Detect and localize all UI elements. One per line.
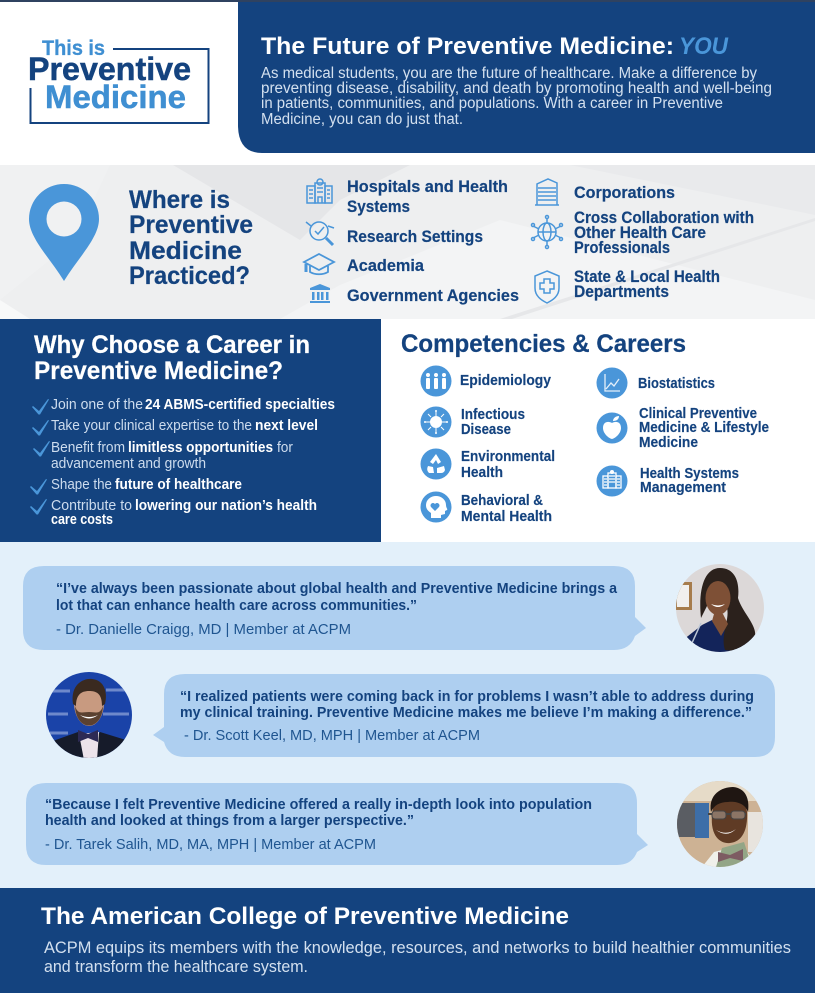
icon: map pin	[29, 184, 99, 281]
heading: Where is Preventive Medicine Practiced: Preventive	[129, 211, 253, 239]
label: infectious disease: Disease	[461, 422, 511, 438]
icon: corporate tower	[535, 179, 559, 205]
quote bubble: Scott Keel: - Dr. Scott Keel, MD, MPH | Member at ACPM	[184, 727, 480, 744]
label: cross collaboration: Professionals	[574, 239, 670, 257]
intro paragraph: in patients, communities, and populations. With a career in Preventive	[261, 95, 723, 112]
checkmark list: advancement and growth	[51, 456, 206, 472]
label: clinical preventive	[639, 406, 769, 451]
quote bubble: Danielle Craigg: - Dr. Danielle Craigg, MD | Member at ACPM	[56, 621, 351, 638]
label: health systems management	[640, 466, 739, 496]
label: hospitals	[347, 178, 508, 216]
footer heading: The American College of Preventive Medicine	[41, 903, 569, 930]
heading: Where is Preventive Medicine Practiced: Where is	[129, 186, 230, 214]
label: research settings: Research Settings	[347, 228, 483, 246]
logo: This is Preventive Medicine: This is	[42, 37, 105, 60]
quote bubble: Tarek Salih	[26, 783, 648, 865]
intro paragraph: preventing disease, disability, and death by promoting health and well-being	[261, 80, 772, 97]
checkmark list: care costs	[51, 512, 113, 528]
label: clinical preventive: Clinical Preventive	[639, 406, 757, 422]
heading: Where is Preventive Medicine Practiced: Medicine	[129, 237, 242, 265]
checkmark list: lowering our nation’s health	[135, 498, 317, 514]
icon: biostatistics chart	[596, 368, 628, 398]
panel: testimonials	[0, 542, 815, 888]
checkmark list: Contribute to	[51, 498, 132, 514]
label: infectious disease: Infectious	[461, 407, 525, 423]
quote bubble: Scott Keel: “I realized patients were coming back in for problems I wasn’t able to address during	[180, 689, 754, 705]
label: clinical preventive: Medicine & Lifestyle	[639, 420, 769, 436]
label: state and local	[574, 268, 720, 301]
label: environmental health: Health	[461, 465, 503, 481]
heading: Where is Preventive Medicine Practiced: Practiced?	[129, 262, 250, 290]
checkmark list: next level	[255, 418, 318, 434]
icon: shield with cross	[535, 271, 559, 303]
label: government agencies: Government Agencies	[347, 287, 519, 305]
heading: competencies: Competencies & Careers	[401, 330, 686, 358]
logo: This is Preventive Medicine: Preventive	[28, 51, 191, 87]
intro paragraph: As medical students, you are the future of healthcare. Make a difference by	[261, 65, 757, 82]
icon: health systems building	[596, 466, 628, 496]
checkmark list: Take your clinical expertise to the	[51, 418, 252, 434]
quote bubble: Danielle Craigg	[23, 566, 646, 650]
label: health systems management: Management	[640, 480, 726, 496]
icon: behavioral head	[420, 492, 452, 522]
icon: globe network	[532, 216, 562, 248]
portrait: Scott Keel	[46, 672, 132, 760]
icon: hospital	[307, 179, 332, 203]
label: clinical preventive: Medicine	[639, 435, 698, 451]
checkmark list: Join one of the	[51, 397, 143, 413]
checkmark list: limitless opportunities	[128, 440, 273, 456]
portrait: Tarek Salih	[677, 781, 763, 867]
panel: where is preventive medicine practiced	[0, 165, 815, 319]
checkmark list: Shape the	[51, 477, 112, 493]
label: biostatistics: Biostatistics	[638, 376, 715, 392]
icon: infectious disease virus	[420, 406, 452, 438]
icon: government building	[310, 284, 330, 303]
icon: research magnifier	[306, 222, 334, 245]
icon: clinical apple	[596, 412, 628, 444]
panel: why choose a career	[0, 319, 381, 542]
label: environmental health	[461, 449, 555, 481]
footer paragraph: and transform the healthcare system.	[44, 957, 308, 976]
label: behavioral and mental health: Behavioral &	[461, 493, 543, 509]
heading: why choose: Why Choose a Career in	[34, 331, 310, 359]
icon: environmental recycle	[420, 448, 452, 480]
label: academia: Academia	[347, 257, 425, 275]
heading: The Future of Preventive Medicine: YOU	[679, 33, 729, 60]
quote bubble: Danielle Craigg: “I’ve always been passionate about global health and Preventive Medicine brings a	[56, 581, 618, 597]
logo: This is Preventive Medicine: Medicine	[45, 79, 186, 115]
heading: The Future of Preventive Medicine: The Future of Preventive Medicine:	[261, 33, 674, 60]
quote bubble: Danielle Craigg: lot that can enhance health care across communities.”	[56, 598, 417, 614]
checkmark list: 24 ABMS-certified specialties	[145, 397, 335, 413]
label: state and local: Departments	[574, 283, 669, 301]
quote bubble: Tarek Salih: - Dr. Tarek Salih, MD, MA, MPH | Member at ACPM	[45, 836, 376, 853]
checkmark list: Benefit from	[51, 440, 125, 456]
logo: This is Preventive Medicine	[28, 37, 208, 123]
heading: why choose	[34, 331, 310, 385]
panel: competencies and careers	[401, 330, 769, 525]
intro paragraph: Medicine, you can do just that.	[261, 111, 463, 128]
footer paragraph: ACPM equips its members with the knowledge, resources, and networks to build healthier communities	[44, 938, 791, 957]
footer paragraph	[44, 938, 791, 976]
panel: header intro	[238, 2, 815, 153]
heading: Where is Preventive Medicine Practiced	[129, 186, 253, 290]
panel: American College of Preventive Medicine footer	[0, 888, 815, 993]
label: hospitals: Hospitals and Health	[347, 178, 508, 196]
quote bubble: Scott Keel	[153, 674, 775, 757]
icon: epidemiology people	[420, 366, 452, 396]
label: cross collaboration: Other Health Care	[574, 224, 706, 242]
checkmark list	[30, 397, 335, 528]
label: behavioral and mental health	[461, 493, 552, 525]
label: health systems management: Health Systems	[640, 466, 739, 482]
label: cross collaboration	[574, 209, 754, 257]
quote bubble: Tarek Salih: “Because I felt Preventive Medicine offered a really in-depth look into population	[45, 797, 592, 813]
intro paragraph	[261, 65, 772, 128]
checkmark list: future of healthcare	[115, 477, 242, 493]
label: behavioral and mental health: Mental Health	[461, 509, 552, 525]
label: infectious disease	[461, 407, 525, 438]
label: hospitals: Systems	[347, 198, 410, 216]
label: state and local: State & Local Health	[574, 268, 720, 286]
icon: graduation cap	[304, 254, 334, 274]
quote bubble: Tarek Salih: health and looked at things from a larger perspective.”	[45, 813, 414, 829]
label: epidemiology: Epidemiology	[460, 373, 551, 389]
label: cross collaboration: Cross Collaboration with	[574, 209, 754, 227]
label: environmental health: Environmental	[461, 449, 555, 465]
quote bubble: Scott Keel: my clinical training. Preventive Medicine makes me believe I’m making a difference.”	[180, 705, 752, 721]
label: corporations: Corporations	[574, 184, 675, 202]
heading: why choose: Preventive Medicine?	[34, 357, 283, 385]
checkmark list: for	[277, 440, 293, 456]
portrait: Danielle Craigg	[676, 564, 764, 652]
